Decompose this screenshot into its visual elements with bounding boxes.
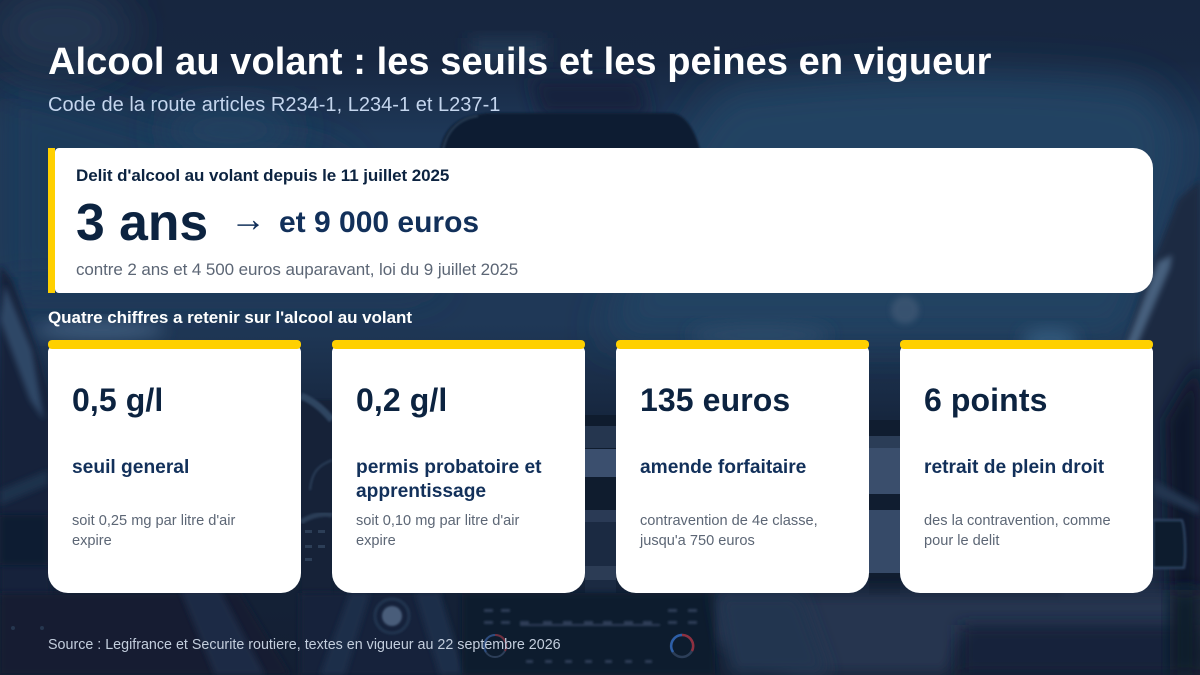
card: 0,5 g/l: seuil general	[72, 457, 189, 478]
card: 6 points: retrait de plein droit	[924, 457, 1104, 478]
card: 6 points: des la contravention, comme pour le delit	[924, 513, 1111, 549]
fine amount: et 9 000 euros	[279, 206, 479, 239]
left vent	[0, 515, 48, 565]
windshield glow	[0, 80, 440, 290]
card: 135 euros: contravention de 4e classe, jusqu'a 750 euros	[640, 513, 818, 549]
subtitle: Code de la route articles R234-1, L234-1 et L237-1	[48, 94, 500, 116]
arrow: →	[230, 198, 266, 239]
rear-view mirror	[530, 78, 650, 115]
card: 135 euros: amende forfaitaire	[640, 457, 806, 478]
panel: main penalty	[48, 148, 1153, 293]
card: 0,2 g/l: permis probatoire et apprentissage	[356, 457, 542, 502]
card: 0,2 g/l: soit 0,10 mg par litre d'air expire	[356, 513, 519, 549]
section heading: Quatre chiffres a retenir sur l'alcool au volant	[48, 308, 412, 327]
card: 0,5 g/l	[48, 340, 301, 593]
gauge details	[375, 599, 409, 633]
panel heading: Delit d'alcool au volant depuis le 11 juillet 2025	[76, 166, 449, 185]
card: 135 euros	[616, 340, 869, 593]
source: Source : Legifrance et Securite routiere, textes en vigueur au 22 septembre 2026	[48, 637, 561, 653]
card: 6 points: 6 points	[924, 382, 1047, 418]
main figure: 3 ans	[76, 193, 208, 251]
accent bar	[48, 148, 55, 293]
panel background	[55, 148, 1153, 293]
lower centre console	[0, 593, 290, 675]
lower dashboard bands (visible between cards)	[301, 400, 332, 600]
card: 0,5 g/l: soit 0,25 mg par litre d'air expire	[72, 513, 235, 549]
title: Alcool au volant : les seuils et les peines en vigueur	[48, 41, 992, 83]
card: 135 euros: 135 euros	[640, 382, 790, 418]
A-pillars	[1060, 180, 1200, 600]
card: 0,5 g/l: 0,5 g/l	[72, 382, 163, 418]
card: 6 points	[900, 340, 1153, 593]
card: 0,2 g/l	[332, 340, 585, 593]
right vent and dash	[1153, 520, 1185, 568]
comparison note: contre 2 ans et 4 500 euros auparavant, loi du 9 juillet 2025	[76, 260, 518, 279]
card: 0,2 g/l: 0,2 g/l	[356, 382, 447, 418]
